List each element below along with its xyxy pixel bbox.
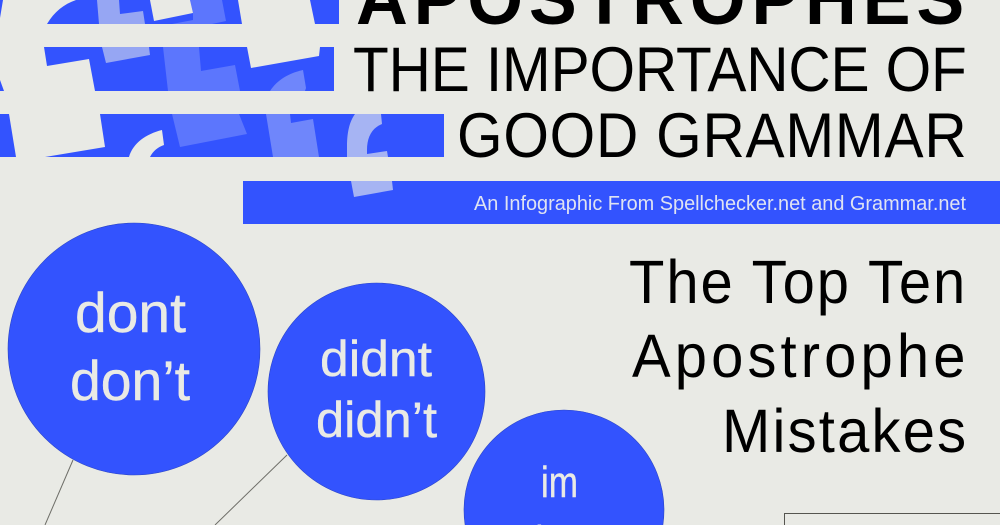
banner: blue stripes with apostrophe shapes (0, 0, 1000, 224)
circle: didnt / didn't (268, 283, 485, 500)
heading: The Top Ten Apostrophe Mistakes: Apostrophe (632, 322, 965, 390)
circle: dont / don't: dont (75, 281, 186, 344)
connector line: dont (45, 460, 73, 525)
stripe 2 (0, 47, 334, 91)
stripe 3 (0, 114, 444, 157)
outlined box (784, 514, 1000, 525)
circle: dont / don't: don’t (70, 349, 190, 412)
heading: The Top Ten Apostrophe Mistakes (629, 248, 966, 465)
subtitle: An Infographic From Spellchecker.net and Grammar.net (474, 193, 966, 215)
circle: im / i'm: im (541, 458, 578, 507)
connector line: didnt (215, 455, 287, 525)
stripe 4: subtitle bar (243, 181, 1000, 224)
stripe 1 (0, 0, 339, 24)
title: GOOD GRAMMAR: GOOD GRAMMAR (457, 100, 967, 170)
circle: didnt / didn't: didn’t (316, 392, 437, 448)
heading: The Top Ten Apostrophe Mistakes: The Top Ten (629, 248, 965, 316)
heading: The Top Ten Apostrophe Mistakes: Mistakes (722, 397, 966, 465)
circle: im / i'm (464, 410, 664, 525)
title: THE IMPORTANCE OF: THE IMPORTANCE OF (353, 34, 967, 104)
circle: didnt / didn't: didnt (320, 331, 432, 387)
apostrophe shapes overlay (97, 0, 393, 197)
circle: dont / don't (8, 223, 260, 475)
